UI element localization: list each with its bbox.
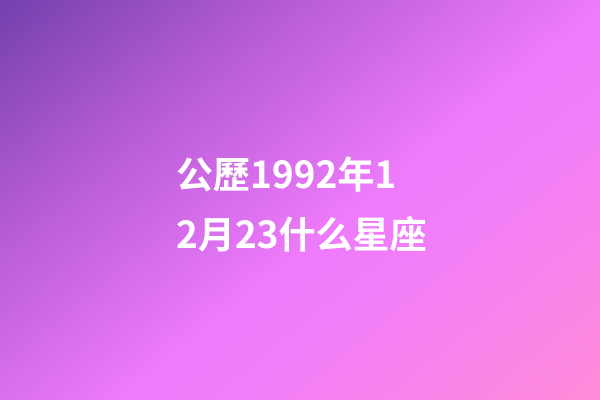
title: [176, 145, 426, 259]
title line 2: 2月23什么星座: [176, 205, 426, 259]
title line 1: 公歷1992年1: [176, 145, 396, 199]
